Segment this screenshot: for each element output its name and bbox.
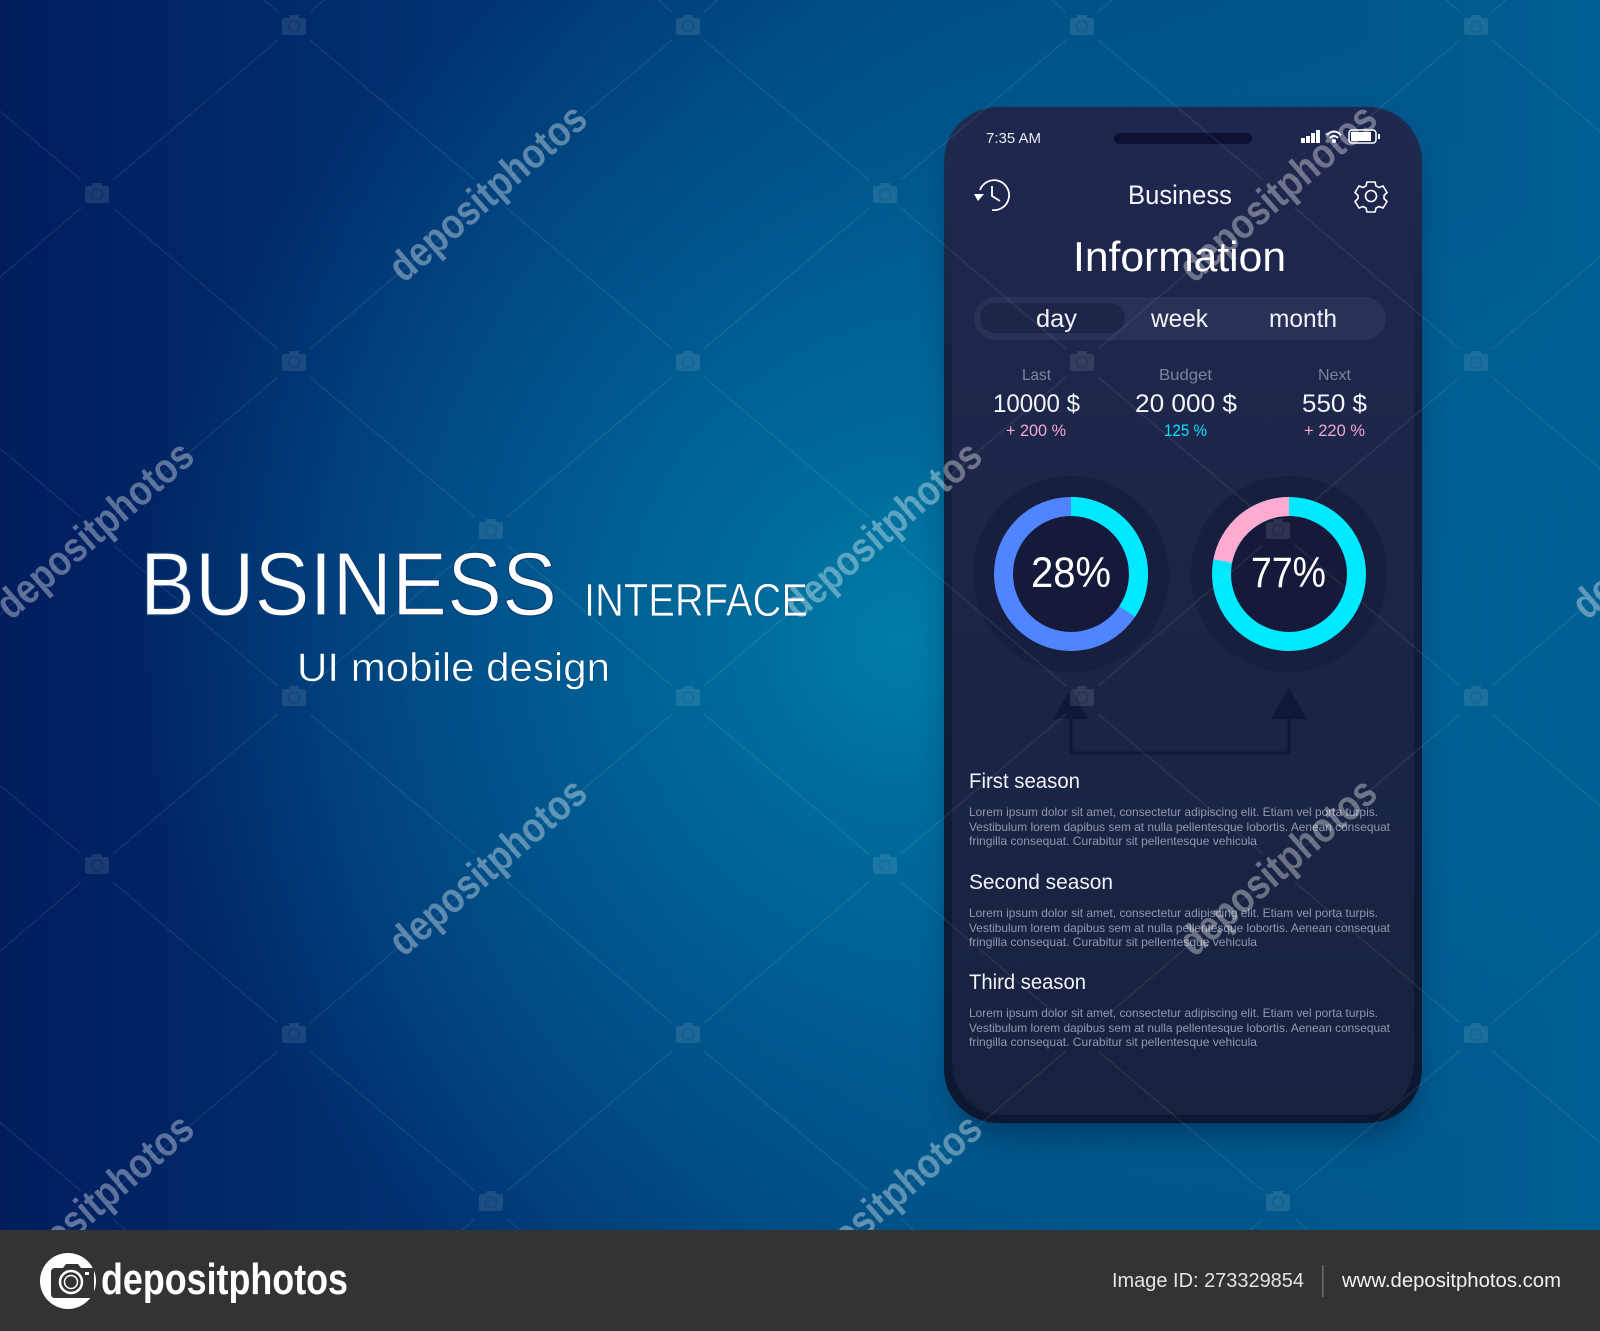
section: second season: Lorem ipsum dolor sit amet, consectetur adipiscing elit. Etiam vel porta turpis. xyxy=(969,906,1378,920)
title: business interface: BUSINESS xyxy=(140,535,557,635)
donut chart: 28% xyxy=(973,476,1169,672)
stat: last xyxy=(993,367,1080,440)
segmented control: week xyxy=(1150,305,1208,333)
stat: budget: 20 000 $ xyxy=(1135,390,1237,418)
heading: business: Business xyxy=(1128,180,1232,210)
section: second season: fringilla consequat. Curabitur sit pellentesque vehicula xyxy=(969,935,1257,949)
section: third season: Third season xyxy=(969,971,1086,994)
icon: wifi xyxy=(1327,132,1341,142)
watermark overlay: depositphotos xyxy=(379,768,596,965)
section: third season: fringilla consequat. Curabitur sit pellentesque vehicula xyxy=(969,1035,1257,1049)
section: first season: First season xyxy=(969,770,1080,793)
section: first season xyxy=(969,770,1391,848)
watermark overlay: depositphotos xyxy=(1169,94,1386,291)
donut chart: 77% xyxy=(1191,476,1387,672)
stat: last: 10000 $ xyxy=(993,390,1080,418)
heading: information: Information xyxy=(1073,233,1286,280)
stat: budget xyxy=(1135,367,1237,440)
stat: next: 550 $ xyxy=(1302,390,1367,418)
speaker notch xyxy=(1114,133,1252,144)
segmented control xyxy=(974,297,1386,340)
phone mockup xyxy=(944,107,1422,1123)
stat: budget: Budget xyxy=(1159,367,1213,384)
subtitle: UI mobile design xyxy=(297,646,610,690)
section: first season: fringilla consequat. Curabitur sit pellentesque vehicula xyxy=(969,834,1257,848)
section: third season: Lorem ipsum dolor sit amet, consectetur adipiscing elit. Etiam vel porta turpis. xyxy=(969,1006,1378,1020)
section: first season: Lorem ipsum dolor sit amet, consectetur adipiscing elit. Etiam vel porta turpis. xyxy=(969,805,1378,819)
section: first season: Vestibulum lorem dapibus sem at nulla pellentesque lobortis. Aenean consequat xyxy=(969,820,1391,834)
section: third season xyxy=(969,971,1391,1049)
stat: last: Last xyxy=(1022,367,1052,384)
watermark overlay: depositphotos xyxy=(774,1104,991,1301)
watermark overlay: depositphotos xyxy=(379,94,596,291)
stat: next: + 220 % xyxy=(1304,421,1365,440)
stat: next xyxy=(1302,367,1367,440)
watermark overlay: depositphotos xyxy=(1169,768,1386,965)
stat: next: Next xyxy=(1318,367,1352,384)
phone shadow xyxy=(950,125,1418,1139)
stat: last: + 200 % xyxy=(1006,421,1066,440)
connector arrows xyxy=(1053,688,1307,753)
footer bar xyxy=(0,1230,1600,1331)
section: second season: Second season xyxy=(969,871,1113,894)
icon: history clock xyxy=(974,180,1009,210)
website url: www.depositphotos.com xyxy=(1341,1270,1561,1292)
footer divider xyxy=(1322,1265,1324,1297)
footer brand name: depositphotos xyxy=(101,1255,348,1304)
status time: 7:35 AM xyxy=(986,130,1041,147)
icon: battery xyxy=(1349,130,1380,143)
icon: depositphotos logo xyxy=(40,1253,96,1309)
section: second season: Vestibulum lorem dapibus sem at nulla pellentesque lobortis. Aenean consequat xyxy=(969,921,1391,935)
icon: signal bars xyxy=(1301,130,1320,143)
section: third season: Vestibulum lorem dapibus sem at nulla pellentesque lobortis. Aenean consequat xyxy=(969,1021,1391,1035)
donut chart: 28%: 28% xyxy=(1031,549,1111,597)
segmented control: day xyxy=(1036,305,1078,333)
watermark overlay: depositphotos xyxy=(774,431,991,628)
segmented control: month xyxy=(1269,305,1337,333)
title: business interface: INTERFACE xyxy=(584,574,808,626)
donut chart: 77%: 77% xyxy=(1251,549,1326,597)
phone body xyxy=(944,107,1422,1123)
section: second season xyxy=(969,871,1391,949)
image id: Image ID: 273329854 xyxy=(1112,1270,1304,1292)
stat: budget: 125 % xyxy=(1164,421,1207,440)
icon: settings gear xyxy=(1355,182,1387,212)
title: business interface xyxy=(140,535,808,635)
